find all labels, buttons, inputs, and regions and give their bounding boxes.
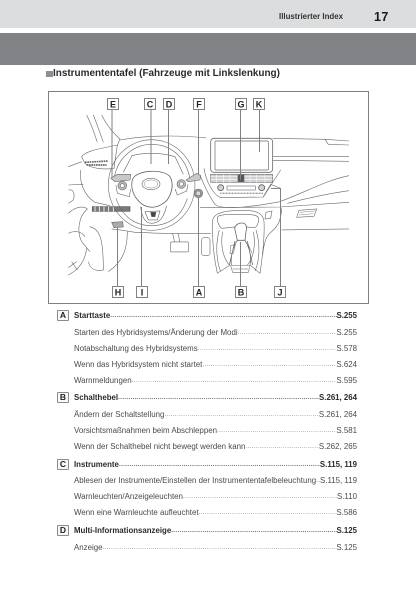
entry C: C [60,459,66,469]
callout letters: H [115,287,121,297]
index list: Wenn das Hybridsystem nicht startet [74,360,202,369]
vents and controls [204,168,281,198]
index list: S.595 [336,376,357,385]
display [211,138,273,172]
index list: S.624 [336,360,357,369]
index list: S.125 [336,543,357,552]
callout letters: D [166,99,173,109]
start button [194,189,203,198]
index list: S.586 [336,508,357,517]
header band [0,0,416,28]
callout letters: F [196,99,202,109]
leader lines [112,109,280,286]
index list: Wenn eine Warnleuchte aufleuchtet [74,508,199,517]
illustration: steering wheel and left dashboard [68,115,211,275]
pedal [173,233,180,242]
index list: Ändern der Schaltstellung [74,410,164,419]
callout letters: K [256,99,263,109]
callout letters: B [238,287,245,297]
entry A [57,310,69,321]
stalks and switches [111,173,201,182]
page number: 17 [374,10,389,24]
callout letters: C [147,99,154,109]
callout labels [108,98,286,298]
index list: Warnleuchten/Anzeigeleuchten [74,492,183,501]
callout letters: E [110,99,116,109]
entry D [57,525,69,536]
index list: Ablesen der Instrumente/Einstellen der Instrumententafelbeleuchtung [74,476,316,485]
index list [57,310,357,552]
small right parts [297,209,317,217]
heading bullet [46,71,53,77]
callout letters: G [237,99,245,109]
index list: S.115, 119 [320,460,357,469]
index list: Anzeige [74,543,103,552]
index list: S.262, 265 [319,442,357,451]
index list: S.110 [337,492,357,501]
index list: Warnmeldungen [74,376,132,385]
hub [132,171,172,207]
entry C [57,459,69,470]
callout letters [110,99,283,297]
index list: Schalthebel [74,393,118,402]
index list: S.581 [336,426,357,435]
wheel rim [108,140,195,230]
entry A: A [60,310,66,320]
heading: Instrumententafel (Fahrzeuge mit Linkslenkung) [53,68,280,79]
running title: Illustrierter Index [279,12,343,21]
illustration: display, centre console and right dashboard [200,138,349,273]
callout letters: J [277,287,283,297]
callout letters: A [196,287,203,297]
index list: Wenn der Schalthebel nicht bewegt werden kann [74,442,245,451]
callout letters: I [141,287,143,297]
index list: Starten des Hybridsystems/Änderung der Modi [74,328,238,337]
entry B [57,392,69,403]
index list: Starttaste [74,311,110,320]
index list: S.255 [336,328,357,337]
section band [0,33,416,65]
frame [48,92,368,304]
index list: S.261, 264 [319,393,357,402]
index list: Notabschaltung des Hybridsystems [74,344,198,353]
index list: S.261, 264 [319,410,357,419]
diagram panel [48,91,369,304]
index list: S.578 [336,344,357,353]
index list: S.115, 119 [320,476,357,485]
index list: Instrumente [74,460,119,469]
entry D: D [60,525,66,535]
index list: Vorsichtsmaßnahmen beim Abschleppen [74,426,217,435]
entry B: B [60,392,66,402]
index list: Multi-Informationsanzeige [74,526,171,535]
console [263,208,282,255]
index list: S.255 [336,311,357,320]
index list: S.125 [336,526,357,535]
